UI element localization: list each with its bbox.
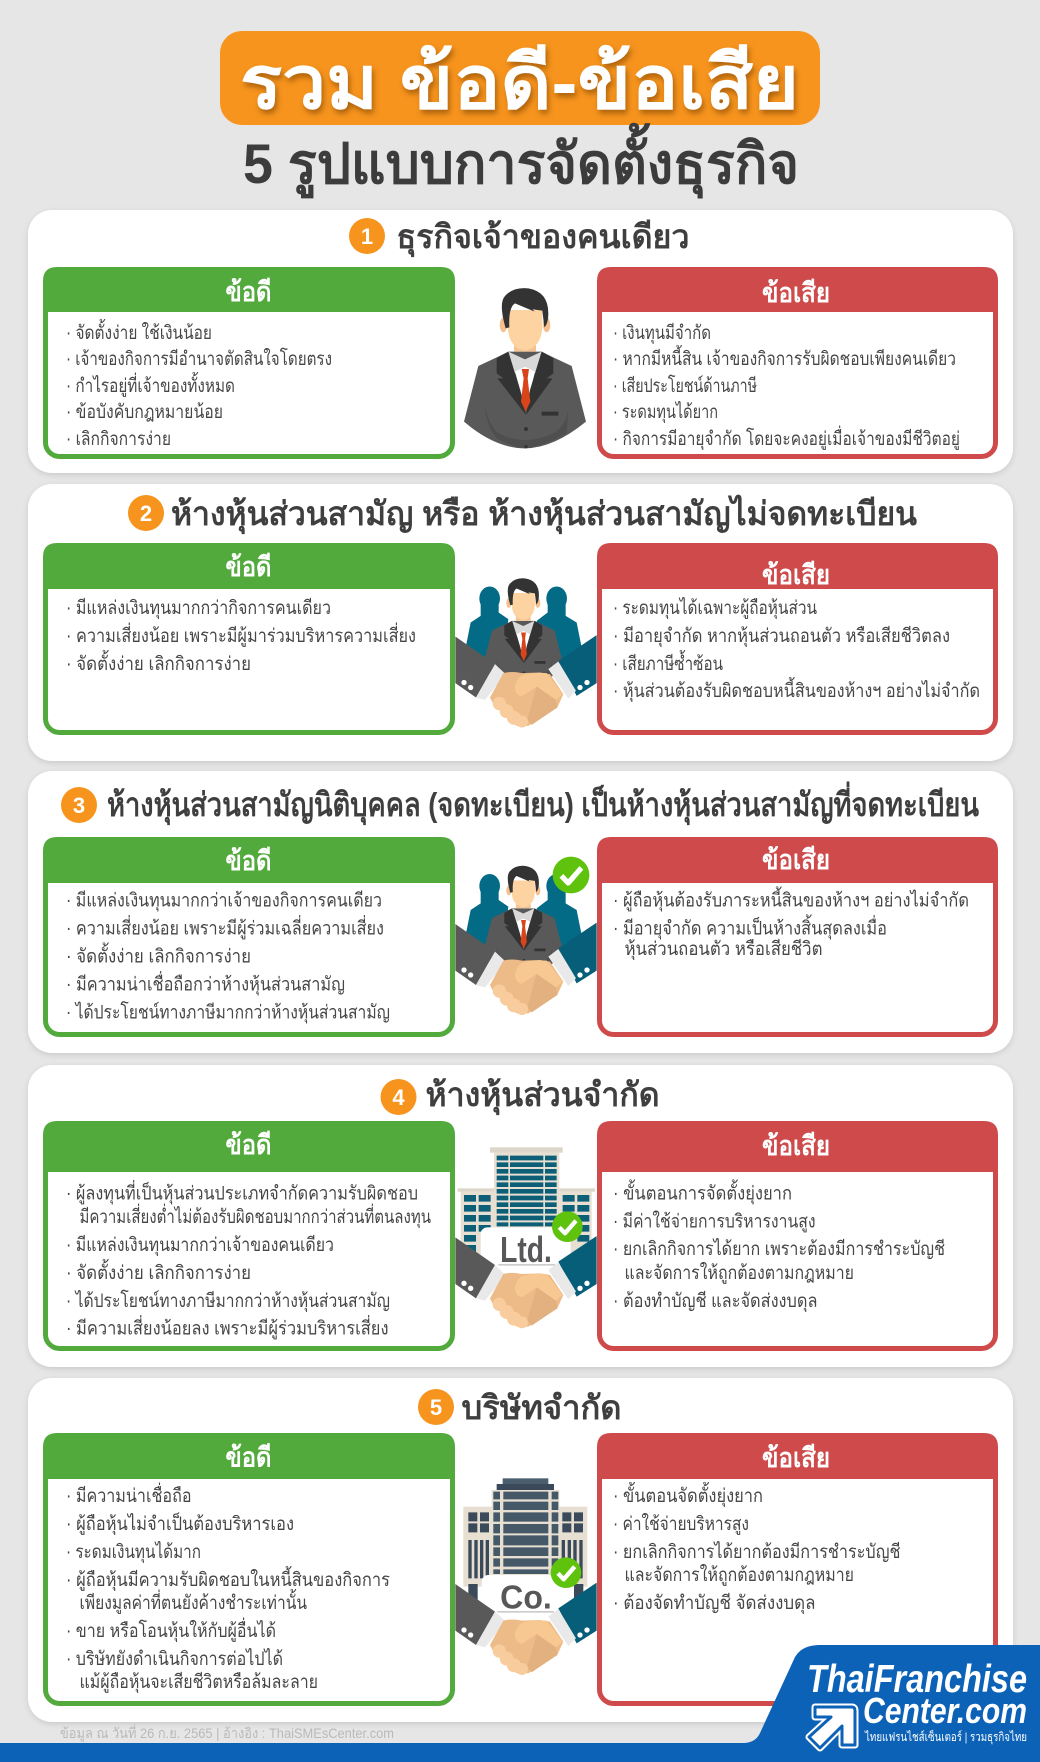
heading: panel 3: 3 (73, 793, 85, 818)
heading: panel 5: 5 (430, 1395, 442, 1420)
heading: panel 2: 2 (140, 501, 152, 526)
advantages box: · จัดตั้งง่าย ใช้เงินน้อย (66, 319, 212, 344)
advantages box: · ขาย หรือโอนหุ้นให้กับผู้อื่นได้ (66, 1617, 276, 1643)
disadvantages box: · ยกเลิกกิจการได้ยาก เพราะต้องมีการชำระบัญชี (613, 1238, 945, 1260)
advantages box: · ความเสี่ยงน้อย เพราะมีผู้มาร่วมบริหารความเสี่ยง (66, 622, 416, 647)
disadvantages box: · มีอายุจำกัด ความเป็นห้างสิ้นสุดลงเมื่อ (613, 914, 887, 940)
advantages box: · เลิกกิจการง่าย (66, 429, 171, 450)
disadvantages box (597, 543, 998, 732)
advantages box: · ข้อบังคับกฎหมายน้อย (66, 402, 223, 423)
disadvantages box (597, 1433, 998, 1704)
disadvantages box: หุ้นส่วนถอนตัว หรือเสียชีวิต (624, 938, 822, 961)
advantages box: · จัดตั้งง่าย เลิกกิจการง่าย (66, 1259, 251, 1284)
heading: panel 2: ห้างหุ้นส่วนสามัญ หรือ ห้างหุ้นส่วนสามัญไม่จดทะเบียน (171, 494, 917, 535)
panel: 3 registered partnership (28, 771, 1013, 1053)
advantages box: · ผู้ถือหุ้นไม่จำเป็นต้องบริหารเอง (66, 1511, 294, 1536)
heading: panel 4: ห้างหุ้นส่วนจำกัด (426, 1076, 660, 1116)
advantages box: · ได้ประโยชน์ทางภาษีมากกว่าห้างหุ้นส่วนสามัญ (66, 1289, 390, 1313)
source note: ข้อมูล ณ วันที่ 26 ก.ย. 2565 | อ้างอิง : ThaiSMEsCenter.com (60, 1724, 394, 1742)
icon: partners handshake (455, 578, 597, 727)
panel: 4 limited partnership (28, 1065, 1013, 1367)
disadvantages box: · ต้องทำบัญชี และจัดส่งงบดุล (613, 1290, 818, 1313)
disadvantages box: · ระดมทุนได้เฉพาะผู้ถือหุ้นส่วน (613, 597, 817, 620)
icon: businessman (464, 288, 586, 448)
disadvantages box: · ระดมทุนได้ยาก (613, 401, 718, 424)
disadvantages box: และจัดการให้ถูกต้องตามกฎหมาย (624, 1564, 854, 1586)
icon: registered partners handshake with check (455, 857, 597, 1015)
heading: panel 1: ธุรกิจเจ้าของคนเดียว (396, 218, 690, 258)
disadvantages box: ข้อเสีย (762, 1443, 830, 1473)
advantages box: · มีแหล่งเงินทุนมากกว่ากิจการคนเดียว (66, 597, 331, 620)
disadvantages box: ข้อเสีย (762, 1131, 830, 1161)
advantages box: ข้อดี (226, 1130, 272, 1160)
advantages box: · ระดมเงินทุนได้มาก (66, 1541, 201, 1564)
advantages box: · มีความน่าเชื่อถือ (66, 1482, 192, 1507)
Co. label: Co. (500, 1580, 552, 1617)
advantages box: · มีความเสี่ยงน้อยลง เพราะมีผู้ร่วมบริหารเสี่ยง (66, 1314, 388, 1340)
panel: 5 company limited (28, 1378, 1013, 1722)
advantages box: · มีแหล่งเงินทุนมากกว่าเจ้าของกิจการคนเดียว (66, 890, 382, 912)
advantages box: ข้อดี (226, 846, 272, 876)
advantages box: · ผู้ถือหุ้นมีความรับผิดชอบในหนี้สินของกิจการ (66, 1566, 390, 1592)
disadvantages box (597, 837, 998, 1034)
advantages box (43, 837, 455, 1034)
advantages box: · กำไรอยู่ที่เจ้าของทั้งหมด (66, 372, 235, 397)
advantages box: · บริษัทยังดำเนินกิจการต่อไปได้ (66, 1648, 283, 1670)
panel: 1 sole proprietorship (28, 210, 1013, 473)
disadvantages box: · มีอายุจำกัด หากหุ้นส่วนถอนตัว หรือเสียชีวิตลง (613, 625, 950, 648)
heading: panel 4: 4 (392, 1085, 405, 1110)
disadvantages box: ข้อเสีย (762, 278, 830, 308)
advantages box: · ได้ประโยชน์ทางภาษีมากกว่าห้างหุ้นส่วนสามัญ (66, 1000, 390, 1024)
footer bar (0, 1743, 1040, 1762)
advantages box: มีความเสี่ยงต่ำไม่ต้องรับผิดชอบมากกว่าส่วนที่ตนลงทุน (80, 1203, 431, 1229)
advantages box: · มีความน่าเชื่อถือกว่าห้างหุ้นส่วนสามัญ (66, 970, 345, 996)
disadvantages box: และจัดการให้ถูกต้องตามกฎหมาย (624, 1262, 854, 1284)
disadvantages box: ข้อเสีย (762, 845, 830, 875)
disadvantages box (597, 267, 998, 456)
disadvantages box (597, 1121, 998, 1348)
icon: Ltd building handshake (455, 1147, 597, 1328)
advantages box: ข้อดี (226, 277, 272, 307)
icon: logo arrow (809, 1707, 855, 1748)
disadvantages box: ข้อเสีย (762, 560, 830, 590)
advantages box: แม้ผู้ถือหุ้นจะเสียชีวิตหรือล้มละลาย (80, 1671, 318, 1694)
Ltd label: Ltd. (500, 1229, 552, 1270)
icon: Co. building handshake (455, 1478, 597, 1675)
advantages box: เพียงมูลค่าที่ตนยังค้างชำระเท่านั้น (80, 1589, 307, 1614)
advantages box: · เจ้าของกิจการมีอำนาจตัดสินใจโดยตรง (66, 347, 332, 370)
disadvantages box: · เงินทุนมีจำกัด (613, 322, 711, 345)
disadvantages box: · เสียภาษีซ้ำซ้อน (613, 650, 723, 675)
advantages box: ข้อดี (226, 1442, 272, 1472)
advantages box: · จัดตั้งง่าย เลิกกิจการง่าย (66, 650, 251, 675)
logo: ThaiFranchise Center.com (745, 1645, 1040, 1748)
disadvantages box: · มีค่าใช้จ่ายการบริหารงานสูง (613, 1210, 816, 1232)
disadvantages box: · หุ้นส่วนต้องรับผิดชอบหนี้สินของห้างฯ อย่างไม่จำกัด (613, 677, 980, 703)
disadvantages box: · เสียประโยชน์ด้านภาษี (613, 374, 757, 397)
advantages box: · จัดตั้งง่าย เลิกกิจการง่าย (66, 942, 251, 968)
advantages box: · ความเสี่ยงน้อย เพราะมีผู้ร่วมเฉลี่ยความเสี่ยง (66, 914, 384, 940)
title banner: รวม ข้อดี-ข้อเสีย (240, 41, 799, 124)
disadvantages box: · ขั้นตอนจัดตั้งยุ่งยาก (613, 1482, 763, 1508)
disadvantages box: · ค่าใช้จ่ายบริหารสูง (613, 1513, 749, 1535)
disadvantages box: · ผู้ถือหุ้นต้องรับภาระหนี้สินของห้างฯ อย่างไม่จำกัด (613, 886, 969, 912)
disadvantages box: · หากมีหนี้สิน เจ้าของกิจการรับผิดชอบเพียงคนเดียว (613, 345, 956, 370)
disadvantages box: · ยกเลิกกิจการได้ยากต้องมีการชำระบัญชี (613, 1541, 901, 1563)
panel: 2 ordinary partnership (28, 484, 1013, 761)
disadvantages box: · กิจการมีอายุจำกัด โดยจะคงอยู่เมื่อเจ้าของมีชีวิตอยู่ (613, 425, 960, 451)
advantages box (43, 267, 455, 456)
heading: panel 5: บริษัทจำกัด (462, 1389, 622, 1426)
subtitle: 5 รูปแบบการจัดตั้งธุรกิจ (243, 123, 799, 199)
advantages box: · มีแหล่งเงินทุนมากกว่าเจ้าของคนเดียว (66, 1234, 334, 1257)
advantages box (43, 1433, 455, 1704)
advantages box (43, 1121, 455, 1348)
disadvantages box: · ขั้นตอนการจัดตั้งยุ่งยาก (613, 1180, 792, 1206)
disadvantages box: · ต้องจัดทำบัญชี จัดส่งงบดุล (613, 1592, 816, 1615)
advantages box (43, 543, 455, 732)
advantages box: ข้อดี (226, 552, 272, 582)
heading: panel 1: 1 (361, 224, 373, 249)
advantages box: · ผู้ลงทุนที่เป็นหุ้นส่วนประเภทจำกัดความรับผิดชอบ (66, 1180, 418, 1206)
